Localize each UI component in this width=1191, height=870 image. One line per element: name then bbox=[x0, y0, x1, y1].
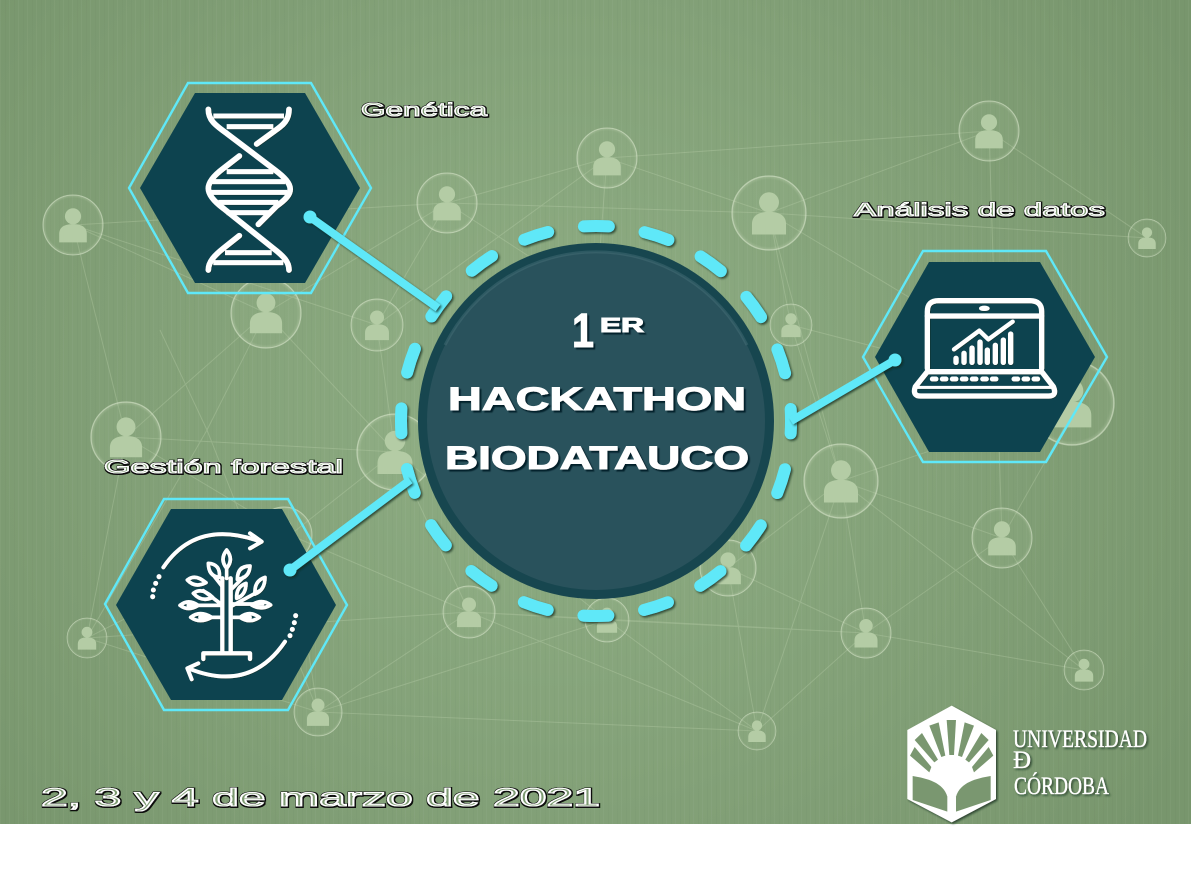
date: 2, 3 y 4 de marzo de 2021 bbox=[41, 784, 600, 812]
logo wordmark: Ð bbox=[1013, 747, 1031, 774]
title: HACKATHON: HACKATHON bbox=[448, 381, 746, 417]
logo wordmark: UNIVERSIDAD bbox=[1013, 726, 1147, 753]
connector: genética to circle bbox=[304, 210, 438, 308]
title: 1er: 1 bbox=[572, 305, 594, 358]
label: Análisis de datos: Análisis de datos bbox=[854, 200, 1105, 220]
hexagon: gestión forestal bbox=[105, 499, 347, 710]
icon: laptop with chart bbox=[914, 301, 1055, 396]
logo: Universidad de Córdoba bbox=[907, 706, 1147, 822]
connector: gestión forestal to circle bbox=[284, 480, 410, 576]
logo emblem bbox=[907, 706, 996, 822]
hexagon: análisis de datos bbox=[863, 251, 1107, 462]
logo wordmark bbox=[1013, 726, 1147, 800]
hexagon: genética bbox=[129, 83, 371, 293]
central circle bbox=[401, 226, 791, 616]
title: 1er: ER bbox=[600, 315, 645, 337]
icon: DNA helix bbox=[208, 109, 290, 270]
dashed ring bbox=[401, 226, 791, 616]
label: Genética: Genética bbox=[361, 100, 489, 120]
label: Gestión forestal: Gestión forestal bbox=[104, 457, 343, 477]
title: 1er bbox=[572, 305, 645, 358]
title: BIODATAUCO: BIODATAUCO bbox=[445, 440, 749, 476]
network of connected people bbox=[43, 101, 1166, 750]
connector: análisis de datos to circle bbox=[791, 354, 902, 421]
logo wordmark: CÓRDOBA bbox=[1014, 772, 1109, 800]
icon: tree in cycle bbox=[153, 533, 296, 679]
